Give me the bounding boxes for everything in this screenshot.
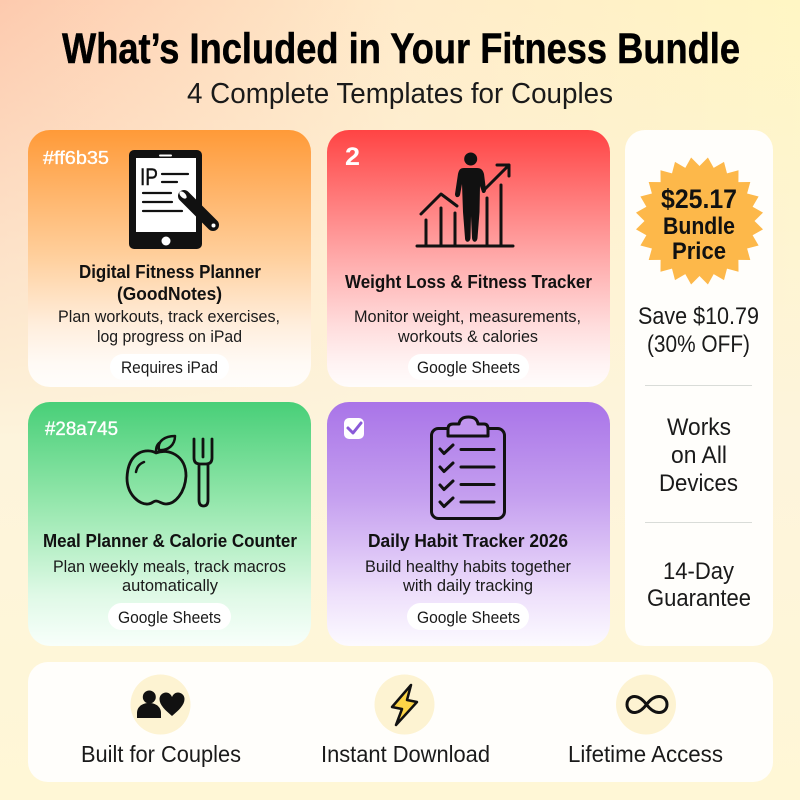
pill: google sheets (108, 603, 231, 630)
card number: 2 (345, 143, 360, 171)
card description (354, 307, 581, 346)
card description (365, 557, 571, 595)
card description: Plan weekly meals, track macros (53, 557, 286, 576)
icon: person and heart (130, 674, 190, 734)
icon: person and progress chart (417, 152, 513, 246)
subtitle: 4 Complete Templates for Couples (187, 78, 613, 110)
icon: infinity (616, 674, 676, 734)
icon: tablet with pencil: IP (140, 164, 158, 191)
pill: google sheets (408, 354, 529, 380)
price badge: Bundle (663, 213, 735, 240)
works on all devices: Devices (659, 470, 738, 497)
benefit: lifetime access (568, 674, 723, 767)
pill: google sheets: Google Sheets (417, 358, 520, 377)
card description (58, 307, 280, 346)
price badge: Price (672, 238, 726, 265)
benefit: instant download: Instant Download (321, 741, 490, 767)
savings text: (30% OFF) (647, 331, 750, 358)
pill: requires ipad (110, 354, 229, 380)
card heading: Weight Loss & Fitness Tracker (345, 271, 592, 292)
card description: with daily tracking (402, 576, 533, 595)
card description: workouts & calories (397, 327, 538, 346)
price badge: $25.17 (661, 184, 737, 214)
icon: apple and fork (127, 436, 212, 506)
card label: #ff6b35 (43, 148, 109, 168)
card description: log progress on iPad (97, 327, 242, 346)
icon: checkbox badge (344, 418, 364, 439)
benefit: instant download (321, 674, 490, 767)
panel: weight loss tracker (327, 130, 610, 387)
card heading: Daily Habit Tracker 2026 (368, 530, 568, 551)
card description: Build healthy habits together (365, 557, 571, 576)
benefit: built for couples (81, 674, 241, 767)
icon: clipboard checklist (432, 417, 504, 518)
pill: google sheets (407, 603, 529, 630)
guarantee: Guarantee (647, 585, 751, 612)
guarantee (647, 558, 751, 612)
pill: google sheets: Google Sheets (118, 608, 221, 627)
card heading (79, 261, 261, 304)
benefit: lifetime access: Lifetime Access (568, 741, 723, 767)
card description: automatically (122, 576, 218, 595)
icon: lightning bolt (374, 674, 434, 734)
card description (53, 557, 286, 595)
pill: google sheets: Google Sheets (417, 608, 520, 627)
panel: meal planner (28, 402, 311, 646)
card heading: Meal Planner & Calorie Counter (43, 530, 297, 551)
savings text (638, 303, 759, 358)
card label: #28a745 (45, 419, 118, 440)
card description: Plan workouts, track exercises, (58, 307, 280, 326)
works on all devices: on All (671, 442, 727, 469)
benefit: built for couples: Built for Couples (81, 741, 241, 767)
icon: tablet with pencil (129, 150, 216, 249)
price badge (636, 158, 763, 284)
savings text: Save $10.79 (638, 303, 759, 330)
guarantee: 14-Day (663, 558, 735, 585)
panel: pricing sidebar (625, 130, 773, 646)
panel: benefits strip (28, 662, 773, 782)
panel: daily habit tracker (327, 402, 610, 646)
works on all devices: Works (667, 414, 731, 441)
card heading: Digital Fitness Planner (79, 261, 261, 282)
card description: Monitor weight, measurements, (354, 307, 581, 326)
works on all devices (659, 414, 738, 497)
card heading: (GoodNotes) (117, 283, 222, 304)
panel: digital fitness planner (28, 130, 311, 387)
pill: requires ipad: Requires iPad (121, 358, 218, 377)
